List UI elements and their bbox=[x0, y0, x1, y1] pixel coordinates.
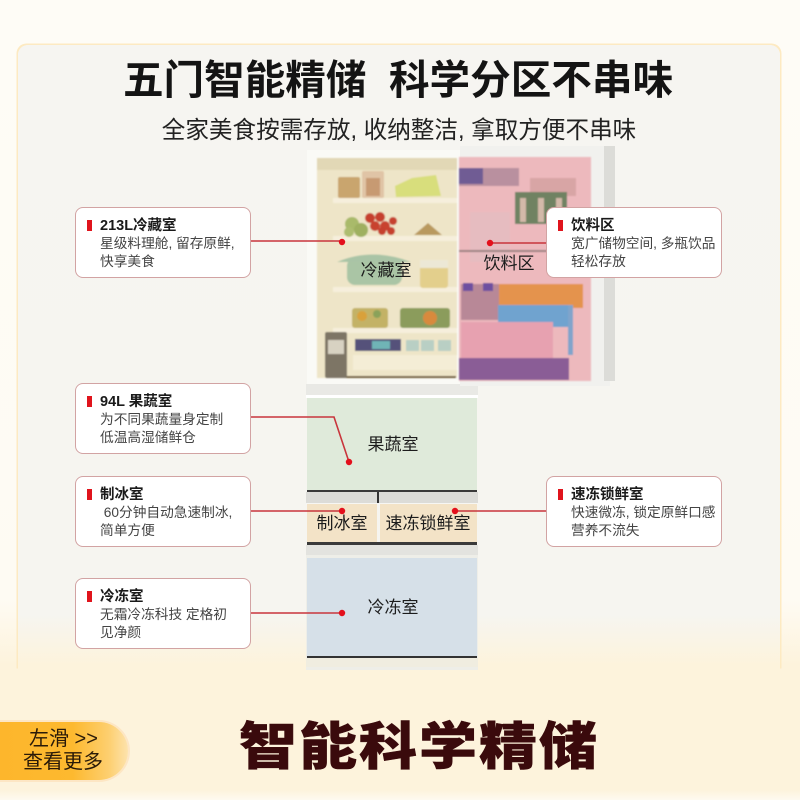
card: 制冰室: 60分钟自动急速制冰, bbox=[104, 505, 232, 520]
label: 冷冻室: 冷冻室 bbox=[368, 598, 418, 617]
card: 饮料区: 宽广储物空间, 多瓶饮品 bbox=[571, 236, 715, 251]
card: 冷冻室: 无霜冷冻科技 定格初 bbox=[100, 607, 227, 622]
swipe text: 查看更多 bbox=[23, 751, 103, 773]
bottom banner slogan: 智能科学精储 bbox=[239, 719, 599, 776]
swipe button bbox=[0, 722, 128, 780]
card: 94L 果蔬室: 94L 果蔬室 bbox=[100, 394, 172, 410]
title: 五门智能精储 科学分区不串味 bbox=[123, 57, 673, 103]
fridge body bbox=[306, 146, 615, 670]
label: 速冻锁鲜室: 速冻锁鲜室 bbox=[386, 514, 470, 533]
card: 冷冻室 bbox=[75, 578, 251, 649]
vegetable drawer bbox=[306, 395, 478, 492]
ice and quick-freeze drawers bbox=[306, 492, 478, 555]
card: 冷冻室: 冷冻室 bbox=[100, 589, 144, 605]
card: 速冻锁鲜室: 速冻锁鲜室 bbox=[571, 487, 644, 503]
card: 94L 果蔬室 bbox=[75, 383, 251, 454]
swipe text bbox=[23, 728, 103, 773]
label: 制冰室: 制冰室 bbox=[316, 514, 368, 533]
food jars bbox=[338, 177, 360, 198]
beverage door bbox=[459, 157, 591, 381]
callout lines and dots bbox=[249, 239, 546, 616]
subtitle: 全家美食按需存放, 收纳整洁, 拿取方便不串味 bbox=[162, 118, 636, 144]
fruit and vegetables bbox=[345, 217, 359, 231]
card: 制冰室 bbox=[75, 476, 251, 547]
card: 制冰室: 简单方便 bbox=[100, 523, 155, 538]
card: 制冰室: 制冰室 bbox=[100, 487, 144, 503]
card: 冷冻室: 见净颜 bbox=[100, 625, 141, 640]
swipe text: 左滑 >> bbox=[29, 728, 98, 750]
label: 果蔬室: 果蔬室 bbox=[368, 435, 418, 454]
card: 速冻锁鲜室: 营养不流失 bbox=[571, 523, 639, 538]
green pot bbox=[347, 258, 402, 285]
card: 94L 果蔬室: 低温高湿储鲜仓 bbox=[100, 430, 196, 445]
label: 冷藏室: 冷藏室 bbox=[360, 261, 412, 280]
freezer drawer bbox=[306, 558, 478, 667]
card: 213L 冷藏室: 星级料理舱, 留存原鲜, bbox=[100, 236, 235, 251]
card: 213L 冷藏室: 213L冷藏室 bbox=[100, 218, 177, 234]
card: 饮料区: 饮料区 bbox=[571, 218, 614, 234]
card: 速冻锁鲜室 bbox=[546, 476, 722, 547]
card: 饮料区: 轻松存放 bbox=[571, 254, 626, 269]
background panel bbox=[18, 45, 780, 670]
label: 饮料区: 饮料区 bbox=[484, 254, 534, 273]
card: 饮料区 bbox=[546, 207, 722, 278]
card: 213L 冷藏室 bbox=[75, 207, 251, 278]
kettle bbox=[325, 332, 347, 378]
card: 94L 果蔬室: 为不同果蔬量身定制 bbox=[100, 412, 223, 427]
card: 速冻锁鲜室: 快速微冻, 锁定原鲜口感 bbox=[571, 505, 715, 520]
control panel bbox=[355, 339, 401, 351]
refrigerator compartment interior bbox=[317, 158, 457, 378]
glass jar bbox=[420, 262, 448, 288]
salad boxes bbox=[352, 308, 388, 328]
card: 213L 冷藏室: 快享美食 bbox=[100, 254, 155, 269]
